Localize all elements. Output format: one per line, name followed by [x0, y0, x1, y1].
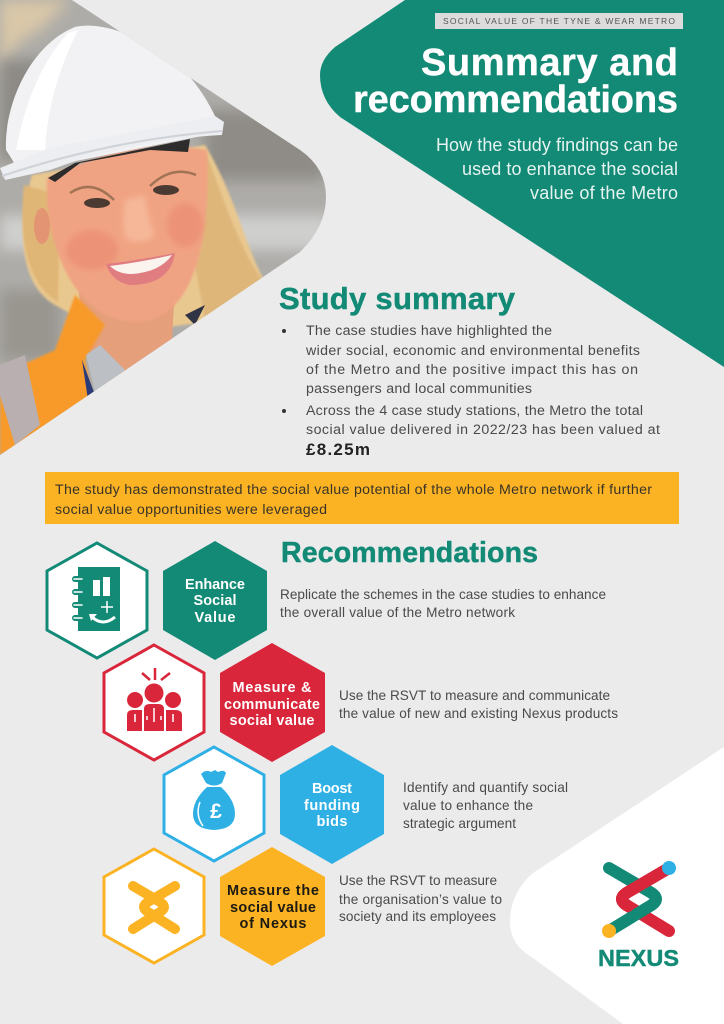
- icon hexagon: notebook: [47, 543, 147, 658]
- heading: recommendations: Recommendations: [281, 537, 538, 569]
- filled hexagon label: funding: [304, 798, 360, 814]
- icon hexagon: money bag: £: [210, 800, 222, 823]
- bottom right white logo panel: [510, 747, 724, 1024]
- recommendation text: Use the RSVT to measure and communicate: [339, 688, 610, 703]
- icon hexagon: money bag: [164, 747, 264, 861]
- recommendation text: Replicate the schemes in the case studies to enhance: [280, 587, 606, 602]
- filled hexagon label: of Nexus: [240, 916, 306, 932]
- document tag: [435, 13, 683, 29]
- title: Summary and: [421, 42, 678, 84]
- heading: study summary: Study summary: [279, 281, 516, 316]
- title: recommendations: [353, 79, 678, 121]
- filled hexagon label: communicate: [224, 697, 320, 713]
- recommendation 2: measure and communicate: [104, 643, 618, 762]
- document tag: SOCIAL VALUE OF THE TYNE & WEAR METRO: [443, 16, 675, 26]
- callout banner: social value opportunities were leveraged: [55, 502, 327, 518]
- filled hexagon label: Enhance: [185, 577, 245, 593]
- recommendation text: the overall value of the Metro network: [280, 605, 515, 620]
- recommendation text: Identify and quantify social: [403, 780, 568, 795]
- subtitle: How the study findings can be: [436, 135, 678, 155]
- filled hexagon label: bids: [316, 814, 348, 830]
- study summary bullets: passengers and local communities: [306, 381, 532, 397]
- study summary bullets: social value delivered in 2022/23 has been valued at: [306, 422, 660, 438]
- filled hexagon label: Measure the: [227, 883, 319, 899]
- icon hexagon: Nexus cross: [104, 849, 204, 963]
- filled hexagon label: Measure &: [232, 680, 312, 696]
- filled hexagon label: Social: [194, 593, 236, 609]
- filled hexagon label: Boost: [312, 781, 352, 797]
- study summary bullets: of the Metro and the positive impact this has on: [306, 362, 638, 378]
- recommendation text: Use the RSVT to measure: [339, 873, 497, 888]
- study summary bullets: £8.25m: [306, 440, 370, 459]
- study summary bullets: wider social, economic and environmental benefits: [305, 343, 640, 359]
- recommendation 3: boost funding bids: [164, 745, 568, 864]
- Nexus logo: [598, 861, 679, 971]
- Nexus logo: NEXUS: [598, 945, 679, 971]
- recommendation text: strategic argument: [403, 816, 516, 831]
- recommendation text: the value of new and existing Nexus products: [339, 706, 618, 721]
- subtitle: used to enhance the social: [462, 159, 678, 179]
- study summary bullets: Across the 4 case study stations, the Metro the total: [306, 403, 643, 419]
- photo: smiling worker in white hard hat: [0, 0, 340, 460]
- recommendation text: value to enhance the: [403, 798, 533, 813]
- filled hexagon label: social value: [230, 713, 314, 729]
- study summary bullets: The case studies have highlighted the: [306, 323, 552, 339]
- recommendation 1: enhance social value: [47, 541, 606, 660]
- subtitle: value of the Metro: [530, 183, 678, 203]
- filled hexagon label: social value: [230, 900, 316, 916]
- filled hexagon label: [220, 643, 325, 762]
- study summary bullets: [282, 323, 660, 459]
- recommendation 4: measure the social value of Nexus: [104, 847, 502, 966]
- filled hexagon label: [163, 541, 267, 660]
- header panel: green rounded arrow shape: [320, 0, 724, 367]
- recommendation text: the organisation’s value to: [339, 892, 502, 907]
- filled hexagon label: [280, 745, 384, 864]
- filled hexagon label: Value: [194, 610, 236, 626]
- recommendation text: society and its employees: [339, 909, 496, 924]
- filled hexagon label: [220, 847, 325, 966]
- icon hexagon: team: [104, 645, 204, 760]
- callout banner: The study has demonstrated the social value potential of the whole Metro network if further: [55, 482, 652, 498]
- callout banner: [45, 472, 679, 524]
